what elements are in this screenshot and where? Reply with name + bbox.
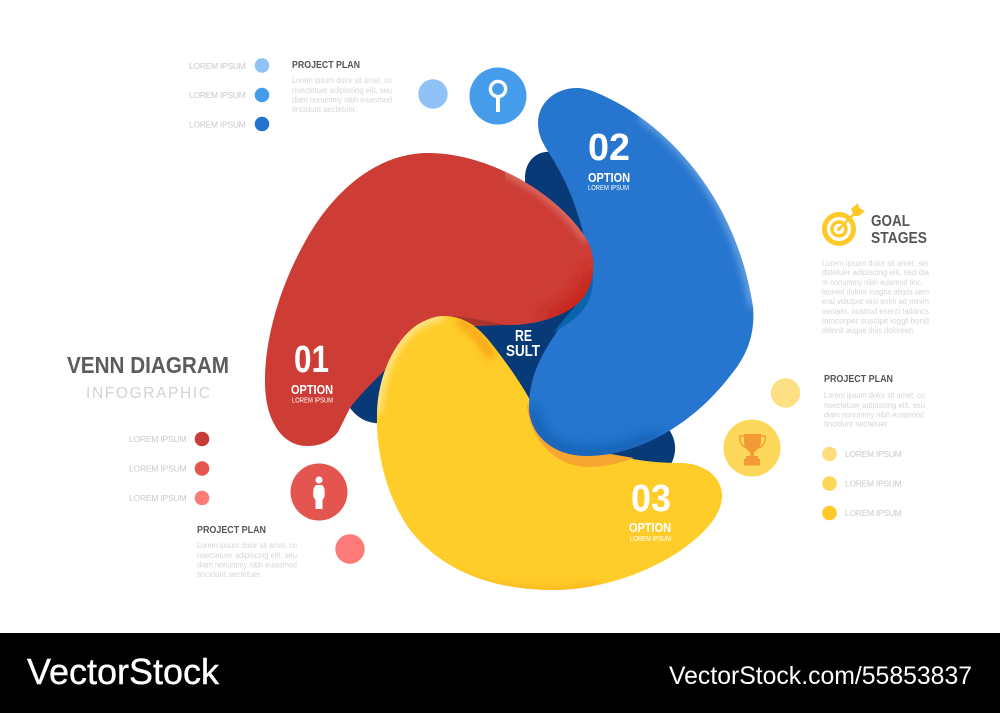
- blue project plan text: diam nonummy nibh euiasmod: [292, 96, 392, 104]
- yellow project plan text: PROJECT PLAN: [824, 373, 893, 385]
- title: [67, 352, 229, 402]
- label: result: SULT: [506, 343, 540, 360]
- shadow of red on blue: [553, 260, 593, 333]
- icon: person: [290, 464, 348, 520]
- title: INFOGRAPHIC: [86, 385, 210, 402]
- label: option 01: OPTION: [291, 383, 333, 397]
- goal stages paragraph: delenit augue duis doloreen.: [822, 326, 915, 335]
- yellow petal: [377, 316, 722, 590]
- label: option 02: 02: [588, 127, 630, 169]
- label: option 01: 01: [294, 339, 329, 381]
- red project plan text: tincidunt sectetuer.: [197, 570, 262, 579]
- goal stages heading: GOAL: [871, 213, 910, 230]
- red small circle: [335, 534, 365, 564]
- icon: trophy: [724, 420, 780, 476]
- goal stages paragraph: [822, 259, 930, 335]
- label: result: [506, 328, 540, 360]
- blue project plan text: nsectetuer adipiscing elit, seu: [292, 86, 392, 95]
- blue petal: [529, 88, 753, 456]
- goal stages heading: [871, 213, 927, 247]
- goal stages paragraph: erat volutpat wisi enim ad minim: [822, 297, 929, 306]
- blue legend: LOREM IPSUM: [189, 61, 246, 71]
- yellow small circle: [771, 378, 800, 408]
- red petal: [265, 153, 593, 446]
- red project plan text: PROJECT PLAN: [197, 524, 266, 536]
- red project plan text: diam nonummy nibh euiasmod: [197, 560, 297, 570]
- blue legend: [189, 58, 269, 131]
- blue small circle: [418, 79, 448, 109]
- goal stages paragraph: m nonummy nibh euismod tinc.: [822, 278, 923, 287]
- red legend: LOREM IPSUM: [129, 434, 187, 444]
- blue project plan text: [292, 59, 393, 114]
- label: option 03: OPTION: [629, 521, 671, 535]
- red petal overlap on blue: [505, 172, 594, 326]
- label: option 02: [588, 127, 630, 192]
- label: option 03: 03: [631, 478, 671, 520]
- label: option 01: [291, 339, 333, 404]
- label: option 02: OPTION: [588, 171, 630, 185]
- label: option 03: [629, 478, 671, 543]
- yellow project plan text: [824, 373, 926, 428]
- label: option 03: LOREM IPSUM: [630, 536, 671, 543]
- title: VENN DIAGRAM: [67, 352, 229, 378]
- red project plan text: nsectetuer adipiscing elit, seu: [197, 551, 297, 560]
- blue legend: LOREM IPSUM: [189, 90, 246, 100]
- blue project plan text: Lorem ipsum dolor sit amet, co: [292, 76, 393, 85]
- blue legend: LOREM IPSUM: [189, 120, 246, 130]
- orange overlap shadow: [527, 405, 634, 467]
- red project plan text: [197, 524, 298, 579]
- red legend: LOREM IPSUM: [129, 493, 187, 503]
- yellow legend: LOREM IPSUM: [845, 478, 902, 488]
- yellow legend: [822, 447, 902, 520]
- goal stages paragraph: Lorem ipsum dolor sit amet, sei: [822, 259, 928, 268]
- goal stages heading: STAGES: [871, 230, 927, 247]
- footer bar: VectorStock: [27, 651, 220, 692]
- footer bar: [0, 633, 1000, 713]
- venn diagram: [265, 88, 753, 590]
- red project plan text: Lorem ipsum dolor sit amet, co: [197, 541, 298, 550]
- goal stages paragraph: laoreet dolore magna aliqds uam: [822, 288, 929, 296]
- blue project plan text: PROJECT PLAN: [292, 59, 360, 71]
- blue project plan text: tincidunt sectetuer.: [292, 105, 357, 114]
- goal stages paragraph: lamcorper suscipit loggf bortd: [822, 316, 929, 326]
- goal stages paragraph: dstetuer adipiscing elit, sed dia: [822, 268, 930, 277]
- yellow legend: LOREM IPSUM: [845, 508, 902, 518]
- yellow project plan text: Lorem ipsum dolor sit amet, co: [824, 391, 926, 400]
- label: result: RE: [515, 328, 532, 345]
- shadow of yellow on red: [450, 316, 507, 326]
- yellow project plan text: nsectetuer adipiscing elit, seu: [824, 401, 925, 410]
- goal stages paragraph: veniam, nostrud exerci tationcs: [822, 307, 929, 316]
- label: option 02: LOREM IPSUM: [588, 185, 629, 192]
- red legend: [129, 432, 209, 505]
- icon: magnifier: [470, 68, 526, 124]
- red legend: LOREM IPSUM: [129, 464, 187, 474]
- label: option 01: LOREM IPSUM: [292, 398, 333, 404]
- navy overlap: result area: [350, 152, 675, 470]
- yellow project plan text: tincidunt sectetuer.: [824, 420, 889, 428]
- yellow project plan text: diam nonummy nibh euiasmod: [824, 410, 924, 420]
- icon: goal target: [824, 203, 865, 244]
- footer bar: VectorStock.com/55853837: [669, 662, 972, 690]
- yellow legend: LOREM IPSUM: [845, 449, 902, 459]
